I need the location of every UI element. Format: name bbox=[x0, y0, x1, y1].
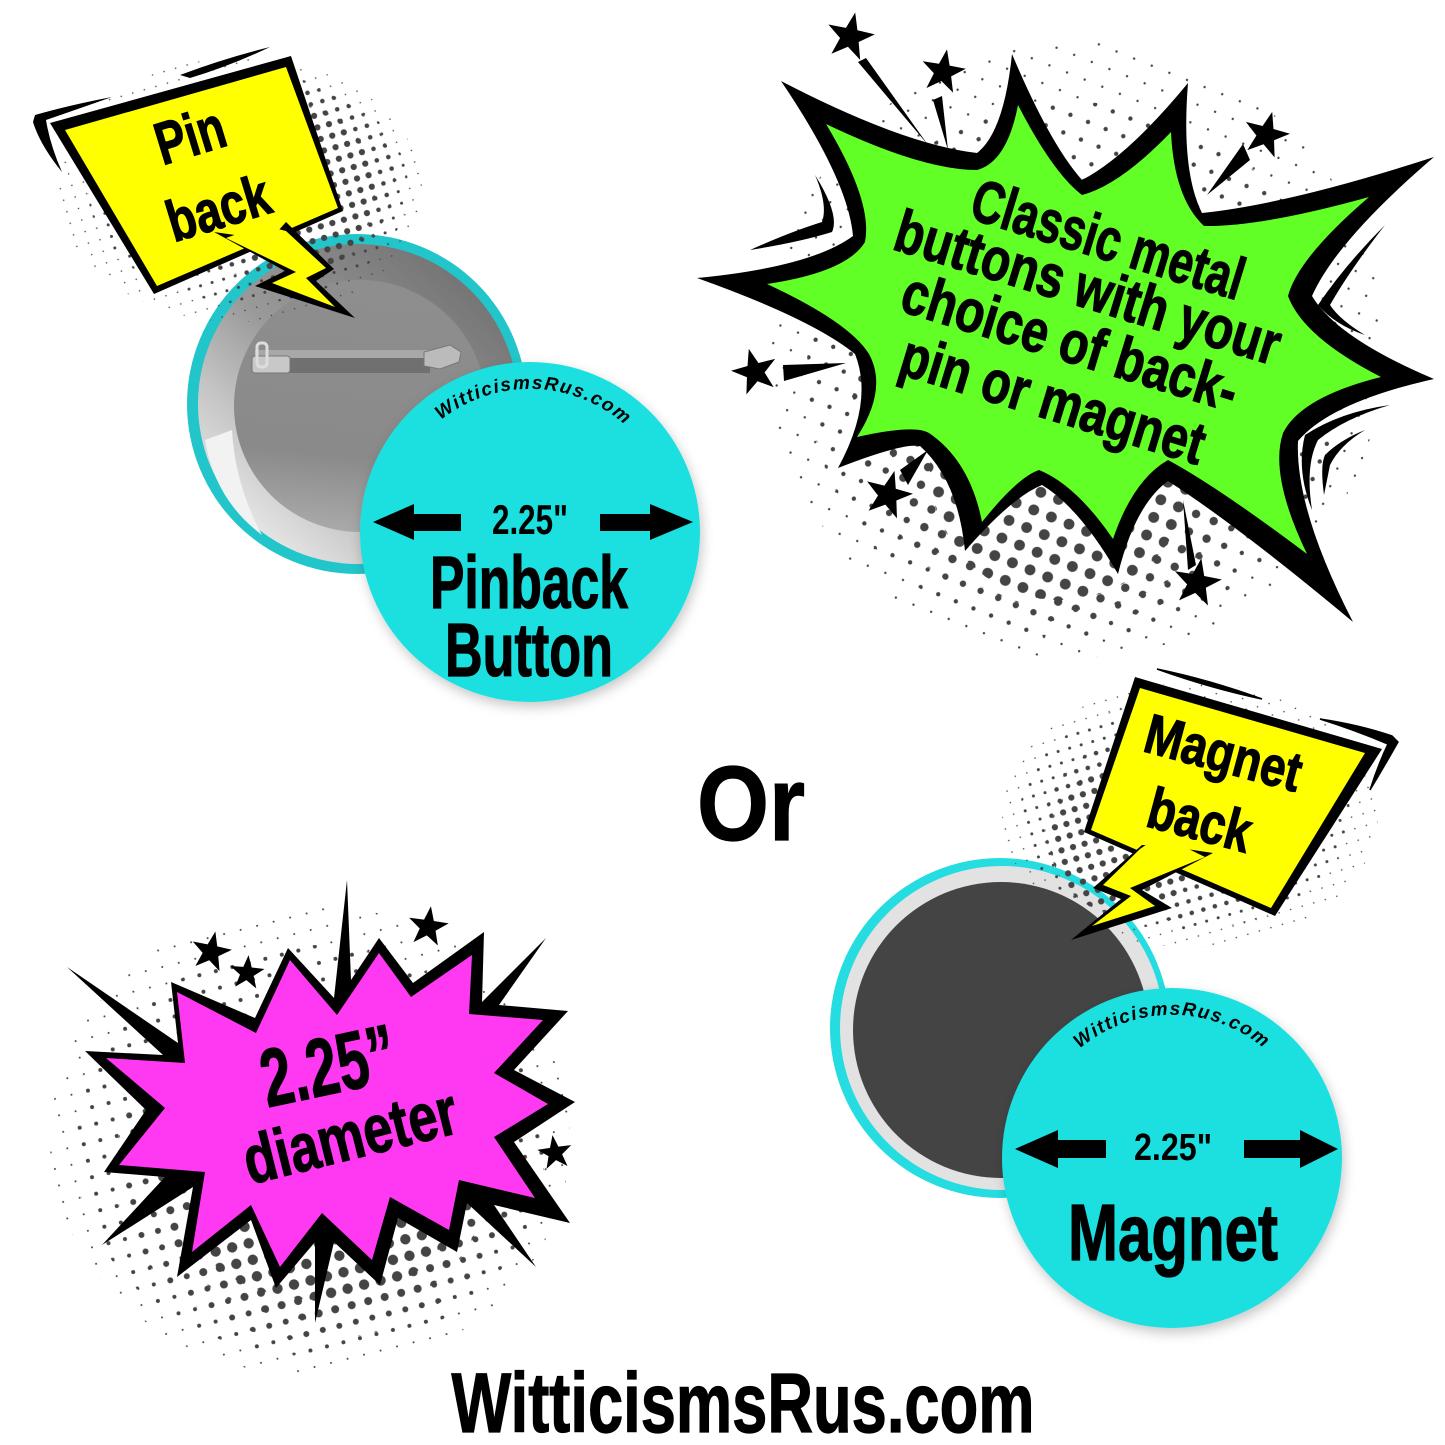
word: Or: Or bbox=[697, 745, 805, 863]
diameter text: diameter bbox=[235, 1073, 465, 1199]
size label: 2.25" bbox=[1134, 1127, 1212, 1169]
label: back: back bbox=[1141, 776, 1260, 866]
magnet back bbox=[830, 858, 1170, 1198]
size text: 2.25” bbox=[252, 1008, 404, 1125]
arrow right bbox=[600, 504, 693, 540]
pinback button group bbox=[33, 47, 740, 713]
halftone behind magenta burst bbox=[50, 905, 570, 1375]
curved website text: WitticismsRus.com bbox=[434, 376, 630, 423]
line 1: Classic metal bbox=[964, 166, 1253, 313]
magnet button group bbox=[830, 668, 1399, 1339]
arrow right bbox=[1244, 1130, 1338, 1168]
curved website text: WitticismsRus.com bbox=[1072, 1002, 1268, 1048]
halftone behind pin back bubble bbox=[58, 58, 422, 322]
label: Pinback: Pinback bbox=[430, 541, 629, 624]
speed lines around green burst bbox=[750, 175, 1390, 510]
green burst text bbox=[887, 166, 1289, 478]
stars and spikes around green burst bbox=[727, 8, 1294, 607]
button front: magnet bbox=[999, 987, 1350, 1339]
halftone behind magnet back bubble bbox=[1002, 683, 1378, 947]
green starburst shape bbox=[697, 54, 1434, 622]
label: Magnet: Magnet bbox=[1138, 701, 1309, 804]
speech bubble: pin back bbox=[33, 47, 355, 318]
speech bubble: magnet back bbox=[1071, 669, 1398, 940]
label: Pin: Pin bbox=[147, 93, 233, 178]
label: Magnet: Magnet bbox=[1068, 1188, 1278, 1277]
stars around magenta burst bbox=[188, 903, 574, 1170]
line 3: choice of back- bbox=[894, 259, 1246, 424]
magenta burst group bbox=[50, 880, 575, 1375]
size label: 2.25" bbox=[492, 496, 568, 543]
label: back: back bbox=[159, 162, 279, 255]
arrow left bbox=[1015, 1130, 1106, 1168]
line 2: buttons with your bbox=[887, 197, 1289, 378]
label: Button: Button bbox=[445, 608, 613, 692]
button back: metal with pin bbox=[187, 234, 527, 574]
magenta starburst shape bbox=[67, 880, 575, 1323]
line 4: pin or magnet bbox=[893, 321, 1214, 478]
button front: pinback bbox=[357, 361, 708, 713]
green burst group bbox=[697, 8, 1434, 658]
arrow left bbox=[373, 504, 461, 540]
halftone behind green burst bbox=[767, 42, 1383, 658]
